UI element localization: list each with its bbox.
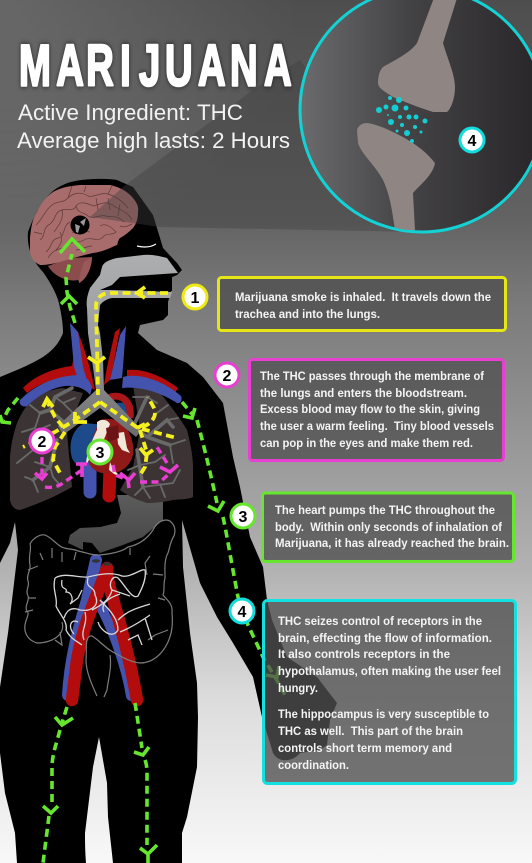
subtitle: active ingredient: Active Ingredient: THC xyxy=(18,100,243,125)
nasal cavity black xyxy=(113,276,172,291)
step 4 badge neuron xyxy=(460,128,484,152)
panel: step 1: Marijuana smoke is inhaled. It travels down the xyxy=(235,290,491,304)
panel: step 4 xyxy=(264,600,516,784)
step 1 badge xyxy=(183,285,207,309)
head airway xyxy=(58,255,178,437)
neuron detail circle xyxy=(300,0,532,232)
brain xyxy=(30,185,156,283)
lung: left xyxy=(10,388,83,510)
panel: step 4: coordination. xyxy=(278,758,349,772)
brainstem and cerebellum xyxy=(48,257,92,283)
brain target marker xyxy=(70,216,90,234)
step 3 badge right xyxy=(231,504,255,528)
neck and chest vessels xyxy=(20,323,182,407)
iliac vessels xyxy=(68,559,137,700)
step 3 badge heart xyxy=(88,440,112,464)
panel: step 3: body. Within only seconds of inhalation of xyxy=(275,520,503,534)
step 4 badge right xyxy=(230,599,254,623)
bronchial tree xyxy=(17,388,185,498)
title: MARIJUANA xyxy=(19,35,292,99)
panel: step 3: Marijuana, it has already reached the brain. xyxy=(275,536,509,550)
colon xyxy=(25,520,175,697)
panel: step 2: the lungs and enters the bloodstream. xyxy=(260,386,467,400)
heart xyxy=(71,396,133,496)
panel: step 2 xyxy=(250,360,504,460)
panel: step 4: brain, effecting the flow of information. xyxy=(278,631,492,645)
panel: step 4: The hippocampus is very susceptible to xyxy=(278,707,489,721)
panel: step 4: hungry. xyxy=(278,681,318,695)
upper neuron xyxy=(378,0,458,112)
step 2 badge right xyxy=(215,363,239,387)
step 2 badge right: 2 xyxy=(223,368,232,385)
step 4 badge right: 4 xyxy=(238,604,247,621)
yellow arrows: smoke path xyxy=(23,287,177,475)
stomach xyxy=(68,495,163,553)
step 4 badge neuron: 4 xyxy=(468,133,477,150)
green arrows: bloodstream xyxy=(0,239,285,863)
panel: step 3 xyxy=(262,493,514,562)
panel: step 2: Excess blood may flow to the skin, giving xyxy=(260,402,480,416)
step 2 badge lung xyxy=(30,429,54,453)
step 3 badge right: 3 xyxy=(239,509,248,526)
THC molecules xyxy=(376,96,428,143)
panel: step 1 xyxy=(218,278,506,330)
step 3 badge heart: 3 xyxy=(96,445,105,462)
panel: step 4: controls short term memory and xyxy=(278,741,452,755)
lung: right xyxy=(120,385,193,503)
subtitle: average high: Average high lasts: 2 Hours xyxy=(17,128,290,153)
panel: step 2: can pop in the eyes and make them red. xyxy=(260,436,473,450)
panel: step 4: THC seizes control of receptors in the xyxy=(278,614,482,628)
panel: step 4: It also controls receptors in the xyxy=(278,647,450,661)
magenta arrows: THC into blood xyxy=(35,447,178,488)
step 1 badge: 1 xyxy=(191,290,200,307)
magnifier beam xyxy=(90,60,422,232)
panel: step 1: trachea and into the lungs. xyxy=(235,307,380,321)
intestines xyxy=(25,520,175,700)
body silhouette xyxy=(0,179,337,863)
eye xyxy=(137,244,156,247)
brain folds xyxy=(34,186,132,258)
step 2 badge lung: 2 xyxy=(38,434,47,451)
panel: step 2: The THC passes through the membrane of xyxy=(260,369,485,383)
panel: step 2: the user a warm feeling. Tiny blood vessels xyxy=(260,419,494,433)
title: MARIJUANA xyxy=(19,35,292,99)
panel: step 4: THC as well. This part of the brain xyxy=(278,724,463,738)
lower neuron xyxy=(357,123,435,230)
panel: step 4: hypothalamus, often making the user feel xyxy=(278,664,501,678)
small intestine xyxy=(54,570,152,645)
panel: step 3: The heart pumps the THC throughout the xyxy=(275,503,495,517)
